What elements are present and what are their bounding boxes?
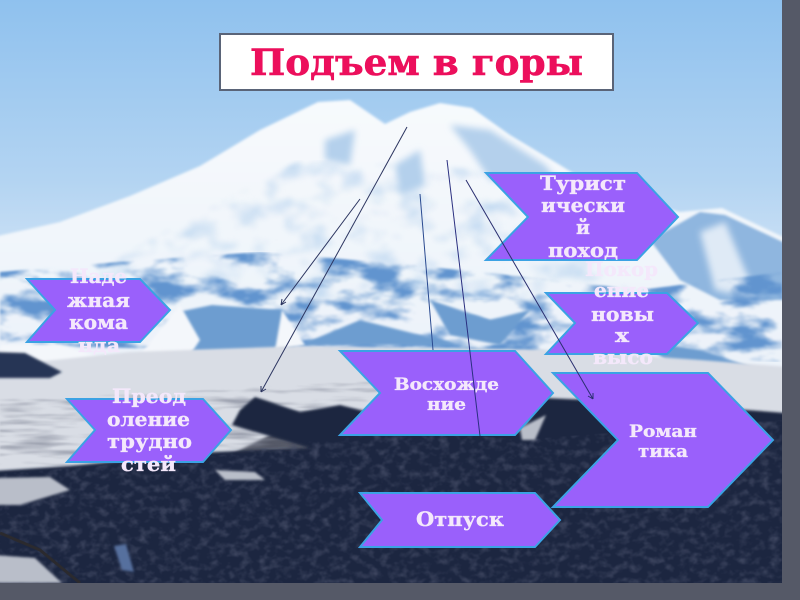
chevron: Восхождение: Восхожде bbox=[394, 375, 499, 395]
snow patches in forest bbox=[0, 415, 546, 583]
snowy plateau bbox=[0, 346, 800, 475]
chevron: Покорение новых высот: х bbox=[615, 323, 630, 347]
chevron: Туристический поход: й bbox=[576, 215, 590, 239]
chevron: Надежная команда: нда bbox=[78, 333, 120, 357]
arrows from summit bbox=[261, 127, 593, 436]
chevron: Преодоление трудностей: Преод bbox=[112, 384, 186, 408]
mottled lower ridges bbox=[0, 252, 782, 362]
line to Отпуск bbox=[447, 160, 480, 436]
arrow to Преодоление трудностей bbox=[261, 127, 407, 392]
chevron: Романтика: тика bbox=[638, 442, 688, 462]
chevron: Отпуск: Отпуск bbox=[416, 507, 505, 531]
line to Восхождение bbox=[420, 194, 433, 350]
chevron: Туристический поход: поход bbox=[548, 238, 618, 262]
chevron: Покорение новых высот: Покор bbox=[585, 257, 658, 281]
title box: Подъем в горы bbox=[250, 42, 583, 84]
chevron: Преодоление трудностей bbox=[67, 384, 231, 476]
chevron: Туристический поход: ически bbox=[541, 193, 625, 217]
snow highlights on ridges bbox=[30, 309, 306, 354]
chevron: Преодоление трудностей: трудно bbox=[107, 429, 192, 453]
chevron: Надежная команда bbox=[27, 264, 170, 357]
chevron: Надежная команда: кома bbox=[69, 310, 128, 334]
chevron: Туристический поход bbox=[486, 171, 678, 262]
arrow to Надежная команда bbox=[281, 199, 360, 305]
chevron: Восхождение: ние bbox=[427, 395, 466, 415]
frozen lake bbox=[114, 544, 134, 572]
dark left hill bbox=[0, 352, 62, 378]
chevron: Покорение новых высот: ение bbox=[594, 278, 649, 302]
chevron: Преодоление трудностей: оление bbox=[107, 407, 190, 431]
chevron: Преодоление трудностей: стей bbox=[121, 452, 176, 476]
blue shadows on the east summit bbox=[325, 125, 565, 195]
chevron: Покорение новых высот: новы bbox=[591, 302, 654, 326]
forest texture bbox=[0, 420, 782, 583]
chevron: Романтика bbox=[553, 373, 773, 507]
dark valley line bbox=[0, 533, 80, 583]
chevron: Романтика: Роман bbox=[629, 422, 697, 442]
chevron: Покорение новых высот bbox=[546, 257, 698, 369]
forested mountains bbox=[0, 397, 800, 600]
title box bbox=[220, 34, 613, 90]
snowy summit massif bbox=[0, 98, 782, 368]
chevron: Надежная команда: Наде bbox=[70, 264, 127, 288]
chevron: Надежная команда: жная bbox=[67, 288, 130, 312]
chevron: Туристический поход: Турист bbox=[540, 171, 626, 195]
chevron: Восхождение bbox=[340, 351, 553, 435]
right ridge bbox=[652, 210, 782, 302]
chevron: Отпуск bbox=[360, 493, 560, 547]
plateau streaks bbox=[0, 380, 380, 470]
blue ridge faces bbox=[182, 299, 746, 365]
arrow to Романтика bbox=[466, 180, 593, 399]
soft shadows on the summit bbox=[60, 160, 640, 300]
sky bbox=[0, 0, 782, 238]
chevron: Покорение новых высот: высо bbox=[593, 345, 653, 369]
